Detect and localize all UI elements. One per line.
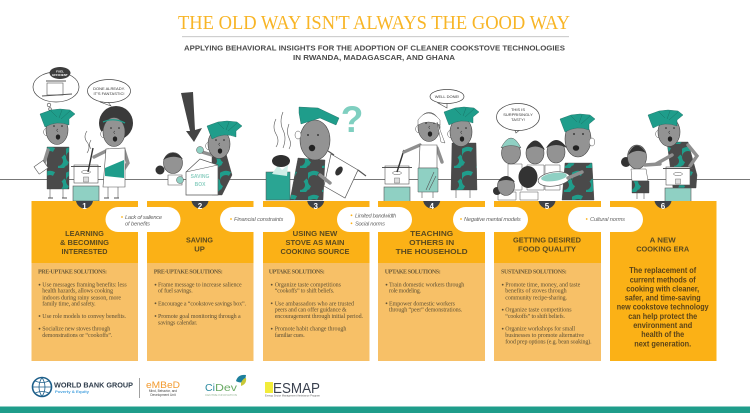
thought bubble: fuel efficient: EFFICIENT xyxy=(52,73,68,77)
solutions text: UPTAKE SOLUTIONS: xyxy=(269,270,325,276)
logo: CiDev: Ci xyxy=(205,383,215,394)
barrier pill: financial constraints: Financial constraints xyxy=(234,217,283,223)
solutions text: SUSTAINED SOLUTIONS: xyxy=(501,270,567,276)
logo: ESMAP: ESMAP xyxy=(273,381,320,397)
solutions text: encouragement through initial period. xyxy=(275,314,364,320)
subtitle xyxy=(184,44,565,62)
number badge 6 xyxy=(654,201,672,211)
heading: LEARNING xyxy=(65,229,104,238)
solutions text: “cookoffs” to shift beliefs. xyxy=(275,288,335,295)
heading: FOOD QUALITY xyxy=(518,244,576,253)
conclusion text: cooking with cleaner, xyxy=(626,284,699,293)
illustration: step 2 saving box xyxy=(156,92,242,195)
footer band xyxy=(0,406,750,413)
subtitle: APPLYING BEHAVIORAL INSIGHTS FOR THE ADOPTION OF CLEANER COOKSTOVE TECHNOLOGIES xyxy=(184,44,565,52)
solutions text: PRE-UPTAKE SOLUTIONS: xyxy=(154,270,223,276)
barrier pill: cultural norms xyxy=(568,207,643,232)
solutions text: Encourage a “cookstove savings box”. xyxy=(158,300,246,307)
solutions text: Organize workshops for small xyxy=(505,326,575,333)
stove xyxy=(71,131,101,201)
barrier pill: cultural norms: Cultural norms xyxy=(590,217,625,223)
panel: step 1 learning and becoming interested xyxy=(32,201,138,361)
saving box xyxy=(186,159,218,195)
number badge 2 xyxy=(192,201,208,211)
heading: STOVE AS MAIN xyxy=(286,238,344,247)
number badge 5: 5 xyxy=(545,202,550,211)
logo: World Bank Group: Poverty & Equity xyxy=(55,389,90,394)
conclusion text: health of the xyxy=(641,330,685,339)
heading: GETTING DESIRED xyxy=(513,235,581,244)
logo: eMBeD xyxy=(146,380,180,397)
thought bubble: fuel efficient: FUEL xyxy=(56,69,64,73)
illustration: step 6 woman and girl with stove xyxy=(621,110,697,203)
icon: question mark: ? xyxy=(341,99,363,140)
heading xyxy=(186,235,213,253)
barrier pill: bandwidth and social norms: Social norms xyxy=(355,221,385,227)
solutions text: peers and can offer guidance & xyxy=(275,307,347,314)
stove with flames xyxy=(266,112,290,200)
solutions text: Promote time, money, and taste xyxy=(505,283,581,289)
solutions text: Train domestic workers through xyxy=(389,283,464,289)
logo: eMBeD: Development Unit xyxy=(150,393,176,397)
solutions text: through “peer” demonstrations. xyxy=(389,307,463,314)
logo: ESMAP: Energy Sector Management Assistance Program xyxy=(265,394,320,398)
heading: TEACHING xyxy=(410,229,453,238)
speech bubble: done already: DONE ALREADY. xyxy=(93,86,125,91)
conclusion text: current methods of xyxy=(630,275,696,284)
heading: A NEW xyxy=(650,235,677,244)
thought bubble: fuel efficient xyxy=(33,67,79,110)
speech bubble: surprisingly tasty: THIS IS xyxy=(511,107,525,112)
illustration: step 3 woman with new stove xyxy=(266,99,366,200)
number badge 3: 3 xyxy=(313,202,318,211)
solutions text: Promote habit change through xyxy=(275,327,346,333)
barrier pill: lack of salience: of benefits xyxy=(125,221,150,227)
heading: UP xyxy=(194,244,205,253)
panel: step 2 saving up xyxy=(147,201,254,361)
speech bubble: surprisingly tasty: TASTY! xyxy=(511,117,525,122)
number badge 1: 1 xyxy=(82,202,87,211)
subtitle: IN RWANDA, MADAGASCAR, AND GHANA xyxy=(293,54,455,62)
illustration: step 1 women and stove xyxy=(33,67,133,201)
panel: step 4 teaching others xyxy=(378,201,485,361)
heading: & BECOMING xyxy=(60,238,109,247)
number badge 4 xyxy=(423,201,440,211)
heading xyxy=(60,229,109,256)
solutions text: indoors during rainy season, more xyxy=(42,295,121,301)
illustration: step 5 family tasting food xyxy=(493,104,595,200)
saving box: BOX xyxy=(195,182,206,188)
solutions text xyxy=(38,270,127,339)
heading: OTHERS IN xyxy=(409,238,454,247)
heading: COOKING SOURCE xyxy=(280,247,350,256)
heading xyxy=(396,229,468,256)
solutions text xyxy=(269,270,364,339)
logo: CiDev: Dev xyxy=(215,383,237,394)
bowl of food xyxy=(537,170,571,188)
stove xyxy=(382,150,412,202)
solutions text: PRE-UPTAKE SOLUTIONS: xyxy=(38,270,107,276)
solutions text: businesses to promote alternative xyxy=(505,333,584,339)
barrier pill: bandwidth and social norms: Limited bandwidth xyxy=(355,213,396,219)
solutions text: benefits of stoves through xyxy=(505,288,567,295)
solutions text: Frame message to increase salience xyxy=(158,283,242,289)
speech bubble: surprisingly tasty xyxy=(496,104,540,133)
barrier pill: negative mental models: Negative mental models xyxy=(464,217,521,223)
solutions text: Use ambassadors who are trusted xyxy=(275,301,354,307)
solutions text: community recipe-sharing. xyxy=(505,295,568,301)
heading xyxy=(513,235,581,253)
solutions text: Promote goal monitoring through a xyxy=(158,314,241,320)
solutions text xyxy=(385,270,464,314)
number badge 1 xyxy=(76,201,93,211)
logo: eMBeD: eMBeD xyxy=(146,380,180,391)
barrier pill: bandwidth and social norms xyxy=(337,207,412,232)
solutions text: Use messages framing benefits: less xyxy=(42,282,127,289)
solutions text: UPTAKE SOLUTIONS: xyxy=(385,270,441,276)
solutions text: demonstrations or “cookoffs”. xyxy=(42,332,113,339)
icon: arrow down xyxy=(181,92,202,142)
title: THE OLD WAY ISN'T ALWAYS THE GOOD WAY xyxy=(178,12,570,34)
logo: eMBeD: Mind, Behavior, and xyxy=(149,389,177,393)
number badge 6: 6 xyxy=(661,202,666,211)
solutions text: of fuel savings. xyxy=(158,288,193,295)
barrier pill: lack of salience: Lack of salience xyxy=(125,215,162,221)
panel: step 5 getting desired food quality xyxy=(494,201,601,361)
solutions text: Socialize new stoves through xyxy=(42,327,110,333)
logo: World Bank Group xyxy=(32,378,133,396)
heading xyxy=(636,235,690,254)
illustration: step 4 teaching in the household xyxy=(382,90,479,202)
number badge 3 xyxy=(307,201,324,211)
heading xyxy=(280,229,350,256)
solutions text: health hazards, allows cooking xyxy=(42,289,113,295)
logo: World Bank Group: WORLD BANK GROUP xyxy=(54,380,133,390)
number badge 4: 4 xyxy=(429,202,434,211)
solutions text: Empower domestic workers xyxy=(389,301,456,307)
new stove xyxy=(324,151,366,198)
heading: THE HOUSEHOLD xyxy=(396,247,468,256)
solutions text: Use role models to convey benefits. xyxy=(42,313,126,320)
solutions text: role modeling. xyxy=(389,289,422,295)
conclusion text: can help protect the xyxy=(628,312,698,321)
speech bubble: surprisingly tasty: SURPRISINGLY xyxy=(503,112,533,117)
heading: SAVING xyxy=(186,235,213,244)
conclusion text: The replacement of xyxy=(629,266,696,275)
logo: CiDev xyxy=(205,375,246,397)
solutions text xyxy=(501,270,592,345)
heading: USING NEW xyxy=(293,229,338,238)
number badge 5 xyxy=(538,201,556,211)
speech bubble: done already: IT'S FANTASTIC! xyxy=(94,91,124,96)
speech bubble: done already xyxy=(88,80,130,106)
solutions text: Organize taste competitions xyxy=(275,283,342,289)
barrier pill: lack of salience xyxy=(106,207,180,232)
number badge 2: 2 xyxy=(198,202,203,211)
solutions text: Organize taste competitions xyxy=(505,308,572,314)
panel: step 3 using new stove xyxy=(263,201,370,361)
panel: step 6 a new cooking era xyxy=(610,201,716,361)
conclusion text: next generation. xyxy=(634,339,691,348)
barrier pill: negative mental models xyxy=(453,207,528,232)
stove xyxy=(663,167,693,203)
solutions text: familiar cues. xyxy=(275,332,305,339)
solutions text: food prep options (e.g. bean soaking). xyxy=(505,338,592,345)
heading: COOKING ERA xyxy=(636,245,690,254)
solutions text: family time, and safety. xyxy=(42,300,96,307)
conclusion text: environment and xyxy=(633,321,692,330)
conclusion text: new cookstove technology xyxy=(617,303,709,312)
conclusion text xyxy=(617,266,709,348)
heading: INTERESTED xyxy=(62,247,108,256)
barrier pill: financial constraints xyxy=(220,207,295,232)
logo: CiDev: CENTRE INNOVATION xyxy=(205,393,237,397)
solutions text: savings calendar. xyxy=(158,320,198,326)
speech bubble: well done: WELL DONE! xyxy=(435,94,459,99)
solutions text xyxy=(154,270,246,326)
saving box: SAVING xyxy=(191,174,210,180)
solutions text: “cookoffs” to shift beliefs. xyxy=(505,313,566,320)
conclusion text: safer, and time-saving xyxy=(625,294,701,303)
